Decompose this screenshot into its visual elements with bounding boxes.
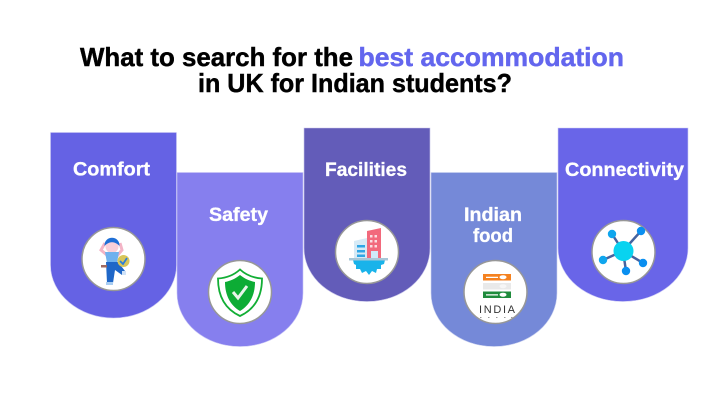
- title: What to search for the: [80, 42, 353, 72]
- heading: facilities: Facilities: [325, 159, 407, 181]
- title: [80, 42, 624, 98]
- panel: indian food: [431, 172, 557, 346]
- icon: india food logo: [464, 260, 527, 324]
- title: best accommodation: [358, 42, 624, 72]
- icon: india food logo: INDIA: [479, 304, 516, 316]
- heading: comfort: Comfort: [73, 158, 151, 180]
- icon: person with ball: [82, 228, 145, 290]
- title: in UK for Indian students?: [198, 68, 512, 98]
- heading: indian food: [464, 204, 522, 247]
- icon: buildings on gear: [336, 220, 398, 284]
- panel: facilities: [304, 128, 430, 302]
- panel: safety: [177, 172, 303, 346]
- panel: comfort: [50, 132, 176, 318]
- icon: network hub: [592, 220, 655, 284]
- heading: indian food: food: [473, 225, 513, 247]
- heading: connectivity: Connectivity: [565, 159, 684, 181]
- heading: indian food: Indian: [464, 204, 522, 226]
- icon: shield: [208, 260, 272, 324]
- heading: safety: Safety: [209, 204, 268, 226]
- panel: connectivity: [558, 128, 688, 302]
